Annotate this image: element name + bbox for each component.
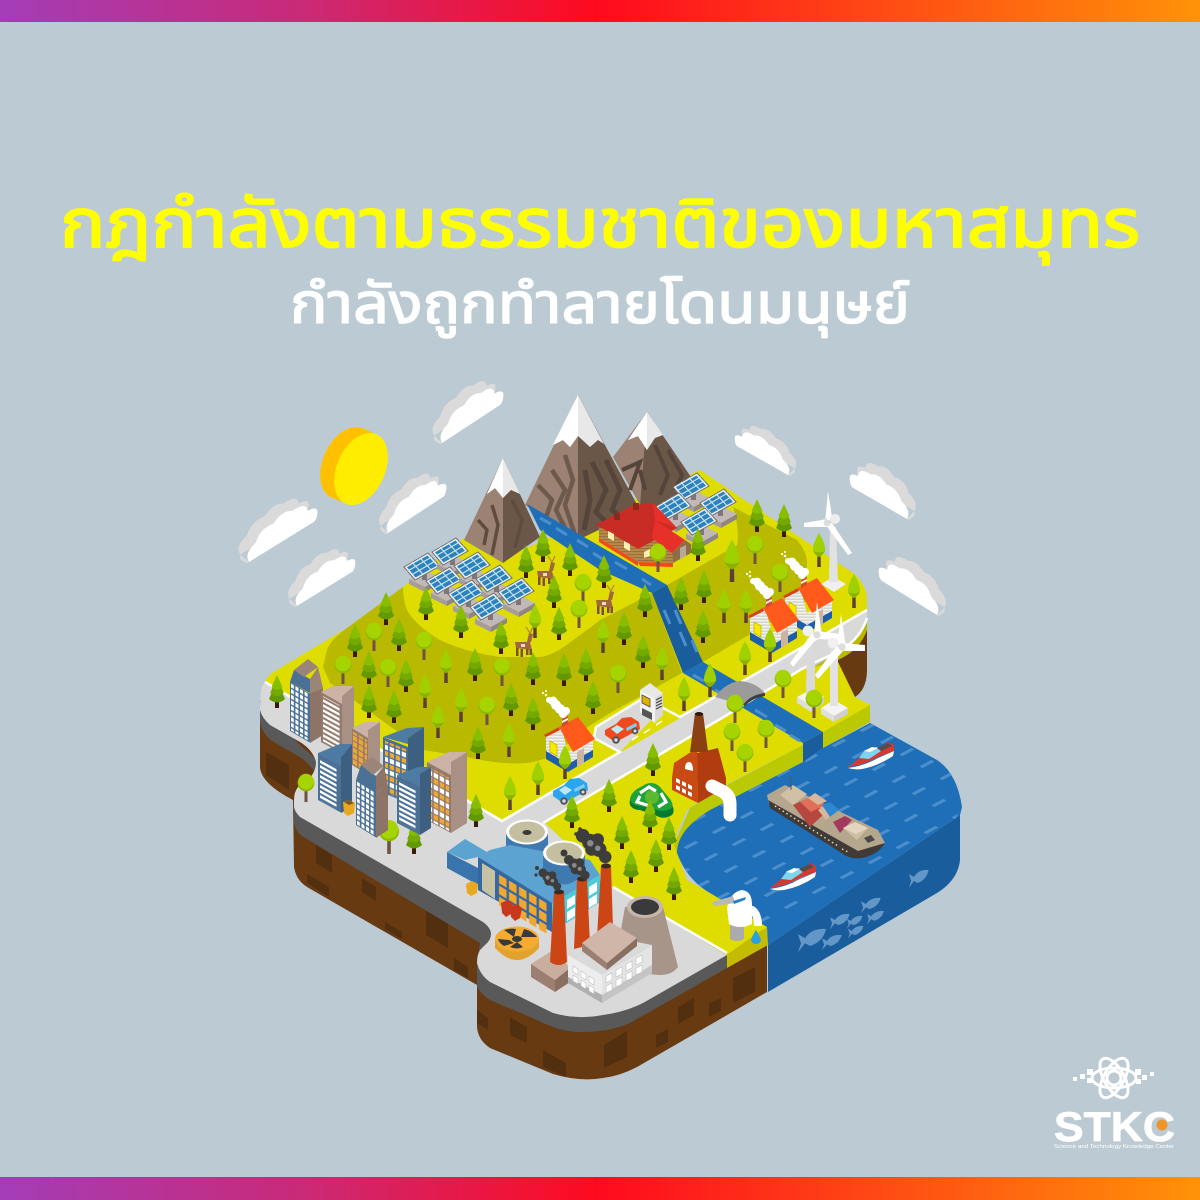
yellow land [265,470,867,821]
mountain back [613,412,695,510]
sea side [768,815,960,992]
pollution plant [447,820,678,1003]
tower 5 [318,744,352,813]
river upper [527,504,667,593]
lower yellow land [545,662,870,955]
olive hill right [667,507,807,662]
olive hill [323,587,682,763]
solar panels right [655,473,737,547]
small factory [672,712,726,803]
radiation disc [495,926,539,960]
paved ground [260,682,727,1017]
bin near towers [343,800,355,816]
top gradient bar [0,0,1200,22]
cloud 1 [238,479,317,568]
cloud 4 [433,362,503,449]
sea waves [677,723,962,935]
clouds [238,362,946,621]
logo dot [1156,1120,1168,1130]
soil right patch [825,600,867,697]
car blue [553,778,588,805]
bridge [715,681,765,706]
cloud 3 [379,456,446,539]
city trees [269,675,484,854]
tower 3 [352,722,380,775]
mountain small [464,458,540,563]
cloud 2 [288,532,355,612]
plant facade [478,857,600,936]
cloud 5 [735,411,796,480]
main road [265,610,867,953]
smoke [534,827,612,890]
fish school [798,870,929,952]
road edge side [260,705,727,1032]
title line 2: กำลังถูกทำลายโดนมนุษย์ [290,265,910,349]
icon: recycling sign [630,783,674,818]
logo tagline: Science and Technology Knowledge Center [1054,1144,1174,1150]
discharge pipe [712,786,730,815]
cargo ship [767,777,885,858]
power building [568,922,652,1003]
houses [542,551,834,772]
logo atom [1092,1054,1136,1102]
tower 4 [383,727,424,803]
mountain large [525,395,640,540]
turbine left [790,602,840,712]
bins [466,881,522,921]
house mid [746,571,799,653]
smokestack base [531,950,570,992]
house front [542,690,595,772]
recycling trees [559,628,822,900]
house back [781,551,834,633]
cloud 7 [879,540,946,621]
farmhouse [596,503,691,567]
tower 2 [321,686,354,754]
forest trees [335,499,860,810]
title line 1: กฎกำลังตามธรรมชาติของมหาสมุทร [60,175,1140,278]
tank tops [506,820,585,884]
plant tank rear [506,832,548,864]
logo [1054,1054,1175,1150]
charging station [640,683,663,723]
solar panels left [404,538,535,632]
soil base [260,700,767,1079]
tower 6 [356,757,388,838]
river side [803,732,823,762]
bottom gradient bar [0,1177,1200,1200]
title [60,175,1140,349]
tower 7 [397,767,431,835]
icon: sun [310,419,398,513]
cloud 6 [850,447,916,524]
logo pixels [1073,1069,1154,1084]
island [260,395,962,1079]
deer [515,556,614,657]
turbine back [804,491,852,592]
waterfall [652,585,703,673]
car red [605,717,640,744]
plant wing [447,839,487,885]
logo wordmark: STKC [1054,1103,1175,1150]
tower 8 [427,752,467,833]
boat upper [848,742,894,769]
boat lower [770,863,816,890]
sea surface [677,723,962,945]
smokestacks [550,864,613,965]
cooling tower [620,896,678,975]
wind turbines [790,491,865,722]
plant roof [478,845,600,904]
land side banks [674,705,870,968]
tower 1 [290,659,323,743]
hillside yellow side [812,612,867,668]
river lower [683,662,823,743]
river ripples [540,518,800,741]
turbine right [815,614,865,722]
water tap [712,890,761,944]
